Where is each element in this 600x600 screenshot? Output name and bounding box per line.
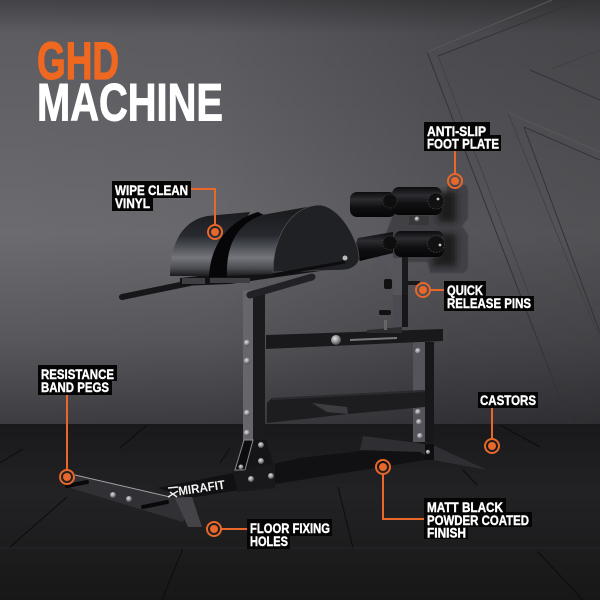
callout: quick release pins: QUICK — [447, 282, 483, 298]
callout: matt black powder coated finish: MATT BLACK — [427, 499, 503, 515]
rear T foot — [360, 436, 487, 470]
rear pad — [227, 205, 359, 276]
title: MACHINE — [37, 74, 223, 132]
floor — [0, 424, 600, 600]
callout: resistance band pegs: BAND PEGS — [41, 379, 109, 395]
callout: resistance band pegs — [38, 365, 117, 484]
title — [37, 32, 223, 132]
callout: resistance band pegs: RESISTANCE — [41, 366, 114, 382]
upper cross bar — [266, 295, 443, 349]
callout: anti-slip foot plate — [424, 122, 501, 188]
rollers — [350, 187, 444, 261]
callout: floor fixing holes — [207, 519, 332, 549]
front cross bar — [67, 475, 202, 527]
callout: quick release pins: RELEASE PINS — [447, 295, 531, 311]
callout: wipe clean vinyl — [112, 181, 222, 239]
lower foot step — [267, 390, 425, 423]
callout: floor fixing holes: FLOOR FIXING — [250, 520, 330, 536]
callout: matt black powder coated finish: FINISH — [427, 524, 466, 540]
MIRAFIT logo: MIRAFIT — [177, 478, 226, 498]
front pad — [170, 212, 264, 277]
callout: floor fixing holes: HOLES — [250, 533, 288, 549]
wall background — [0, 0, 600, 425]
handle and pad frame — [122, 259, 355, 297]
GHD machine — [67, 185, 487, 527]
callout: anti-slip foot plate: FOOT PLATE — [427, 136, 499, 152]
callout: anti-slip foot plate: ANTI-SLIP — [427, 123, 486, 139]
rear upright — [413, 342, 434, 442]
quick release pin — [384, 279, 420, 289]
callout: wipe clean vinyl: WIPE CLEAN — [115, 182, 188, 198]
callout: matt black powder coated finish: POWDER COATED — [427, 512, 529, 528]
callout: wipe clean vinyl: VINYL — [115, 195, 150, 211]
callout: castors — [478, 392, 538, 453]
callout: castors: CASTORS — [480, 392, 536, 408]
foot plate — [377, 185, 468, 325]
long base beam — [157, 442, 425, 498]
callout: quick release pins — [416, 281, 534, 311]
main upright — [235, 290, 278, 484]
callout: matt black powder coated finish — [376, 460, 532, 540]
title: GHD — [37, 32, 119, 91]
bolts — [110, 340, 430, 502]
